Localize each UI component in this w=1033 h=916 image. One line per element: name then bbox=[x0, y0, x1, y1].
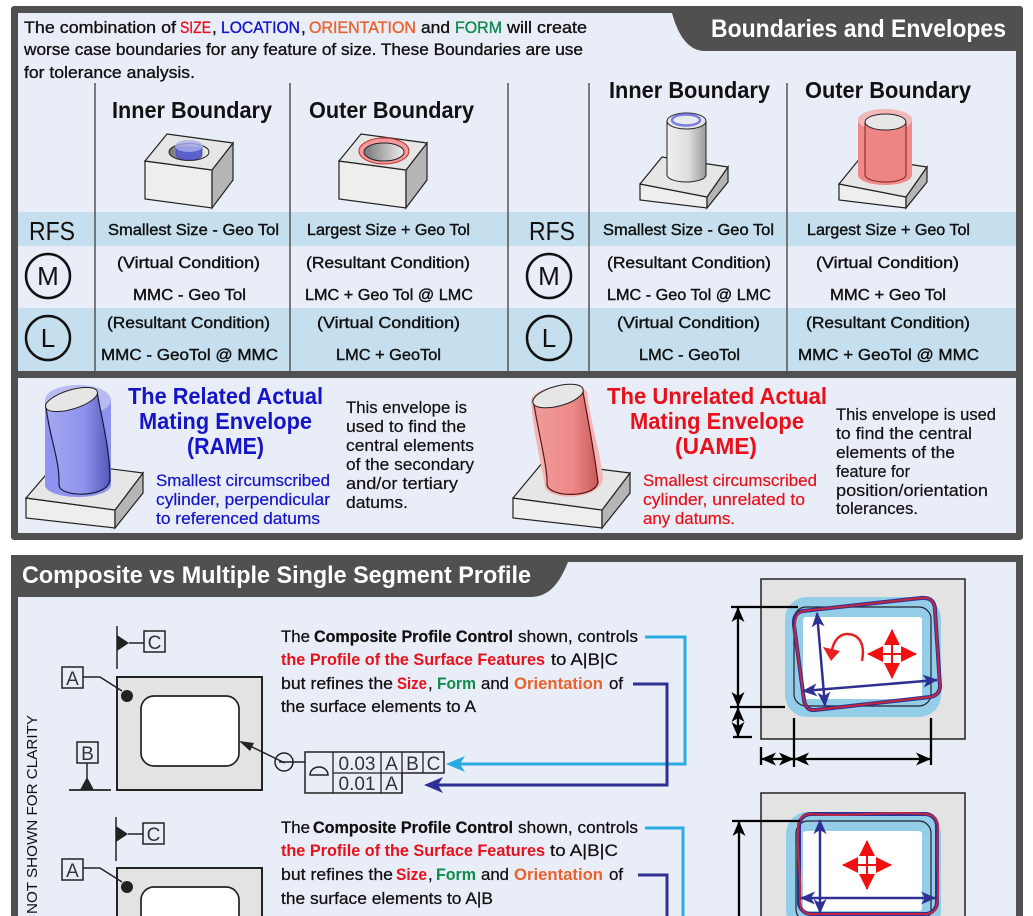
arrow: refinement to A bbox=[424, 684, 667, 793]
column headings: Outer Boundary bbox=[805, 77, 971, 103]
intro text: and bbox=[421, 18, 450, 37]
drawing 2: part with datums: A bbox=[66, 861, 79, 882]
description 2: but refines the bbox=[281, 866, 393, 884]
RAME definition: to referenced datums bbox=[156, 510, 320, 528]
icon: RAME bent pin in blue cylinder bbox=[26, 383, 143, 528]
description 1: of bbox=[609, 675, 623, 693]
description 1: but refines the bbox=[281, 675, 393, 693]
symbol: LMC left: L bbox=[41, 323, 55, 353]
UAME definition: Smallest circumscribed bbox=[643, 472, 817, 490]
table cell text: (Resultant Condition) bbox=[607, 255, 771, 272]
feature control frame 1: C bbox=[427, 754, 440, 775]
intro text: , bbox=[212, 18, 217, 37]
table cell text: (Resultant Condition) bbox=[306, 255, 470, 272]
header tab: boundaries and envelopes: Boundaries and Envelopes bbox=[711, 15, 1006, 43]
table cell text: LMC - Geo Tol @ LMC bbox=[607, 287, 771, 304]
UAME usage note: feature for bbox=[836, 463, 910, 481]
UAME title: (UAME) bbox=[675, 433, 757, 459]
table cell text: Smallest Size - Geo Tol bbox=[603, 222, 774, 239]
description 2: Form bbox=[436, 866, 476, 884]
arrows: second description bbox=[638, 828, 683, 916]
RAME title: Mating Envelope bbox=[139, 408, 312, 434]
description 1: Orientation bbox=[514, 675, 603, 693]
RAME usage note: central elements bbox=[346, 437, 474, 455]
drawing 1: part with datums: B bbox=[81, 744, 94, 765]
table cell text: MMC + Geo Tol bbox=[830, 287, 946, 304]
intro text: will create bbox=[506, 18, 587, 37]
icon: red translation cross bbox=[868, 630, 916, 678]
description 1: Composite Profile Control bbox=[314, 628, 513, 646]
drawing 1: part with datums: C bbox=[148, 633, 161, 654]
UAME usage note: to find the central bbox=[836, 425, 972, 443]
description 1: shown, controls bbox=[518, 628, 638, 646]
description 1 bbox=[281, 628, 638, 716]
description 2: Composite Profile Control bbox=[313, 819, 513, 837]
symbol: MMC left: M bbox=[37, 261, 59, 291]
drawing 1: part with datums: A bbox=[66, 669, 79, 690]
UAME title bbox=[607, 383, 827, 459]
dimension arrows: blue bbox=[803, 613, 937, 706]
intro text: , bbox=[301, 18, 306, 37]
table cell text: (Resultant Condition) bbox=[806, 315, 970, 332]
UAME usage note: elements of the bbox=[836, 444, 955, 462]
UAME usage note bbox=[836, 406, 996, 518]
RAME usage note: used to find the bbox=[346, 418, 466, 436]
symbol: MMC left bbox=[26, 254, 70, 298]
intro text: ORIENTATION bbox=[309, 18, 416, 37]
intro text: SIZE bbox=[180, 18, 211, 37]
feature control frame 1: 0.03 bbox=[339, 754, 375, 775]
RAME usage note: of the secondary bbox=[346, 456, 475, 474]
intro text bbox=[23, 18, 587, 82]
table cell text: LMC - GeoTol bbox=[639, 347, 740, 364]
UAME title: The Unrelated Actual bbox=[607, 383, 827, 409]
UAME usage note: tolerances. bbox=[836, 500, 918, 518]
feature control frame 1: 0.01 bbox=[339, 774, 375, 795]
RAME usage note: and/or tertiary bbox=[346, 475, 459, 493]
intro text: The combination of bbox=[24, 18, 176, 37]
table cell text: (Resultant Condition) bbox=[107, 315, 270, 332]
description 2: shown, controls bbox=[518, 819, 638, 837]
UAME definition bbox=[643, 472, 817, 528]
header tab: composite vs multiple: Composite vs Multiple Single Segment Profile bbox=[22, 562, 531, 589]
icon: hole outer boundary bbox=[339, 134, 427, 208]
RAME title: (RAME) bbox=[187, 433, 264, 459]
description 1: Size bbox=[397, 675, 427, 693]
description 2: Orientation bbox=[514, 866, 603, 884]
table cell text: MMC - Geo Tol bbox=[133, 287, 246, 304]
dimension arrows: blue bbox=[801, 820, 935, 913]
icon: pin inner boundary bbox=[640, 113, 728, 208]
dimension lines: black bbox=[730, 607, 931, 767]
symbol: MMC right bbox=[527, 254, 571, 298]
intro text: worse case boundaries for any feature of size. These Boundaries are use bbox=[23, 40, 583, 59]
table cell text: (Virtual Condition) bbox=[617, 315, 760, 332]
description 1: , bbox=[428, 675, 433, 693]
table cell text: (Virtual Condition) bbox=[816, 255, 959, 272]
icon: red rotation arrow bbox=[823, 634, 863, 661]
description 2: , bbox=[428, 866, 433, 884]
column headings bbox=[112, 77, 971, 123]
icon: UAME bent pin in red cylinder bbox=[513, 380, 630, 528]
table column lines bbox=[95, 83, 787, 371]
intro text: for tolerance analysis. bbox=[24, 63, 195, 82]
description 2 bbox=[281, 819, 638, 908]
table row bands bbox=[18, 212, 1016, 371]
dimension line: black bbox=[732, 821, 800, 916]
arrow: profile to ABC bbox=[446, 637, 685, 772]
diagram 1: tolerance zones rotated bbox=[730, 579, 965, 767]
column headings: Inner Boundary bbox=[609, 77, 770, 103]
row label: RFS left: RFS bbox=[29, 216, 75, 246]
intro text: LOCATION bbox=[221, 18, 300, 37]
symbol: LMC right: L bbox=[542, 323, 556, 353]
symbol: LMC left bbox=[26, 316, 70, 360]
icon: pin outer boundary bbox=[839, 109, 927, 208]
drawing 2: part with datums: C bbox=[147, 825, 160, 846]
feature control frame 1: A bbox=[385, 754, 398, 775]
RAME usage note bbox=[346, 399, 475, 512]
panel: boundaries and envelopes bbox=[11, 6, 1023, 540]
panel: composite vs multiple single segment profile bbox=[11, 555, 1023, 916]
header tab: boundaries and envelopes bbox=[672, 13, 1016, 51]
symbol: LMC right bbox=[527, 316, 571, 360]
UAME usage note: This envelope is used bbox=[836, 406, 996, 424]
description 1: the Profile of the Surface Features bbox=[281, 651, 545, 669]
RAME usage note: datums. bbox=[346, 494, 408, 512]
description 1: The bbox=[281, 628, 310, 646]
table cell text: Largest Size + Geo Tol bbox=[307, 222, 470, 239]
description 2: the Profile of the Surface Features bbox=[281, 842, 545, 860]
table cell text bbox=[101, 222, 979, 364]
UAME usage note: position/orientation bbox=[836, 482, 988, 500]
feature control frame 1: A bbox=[385, 774, 398, 795]
table cell text: LMC + Geo Tol @ LMC bbox=[305, 287, 473, 304]
feature control frame 1: B bbox=[406, 754, 419, 775]
description 1: to A|B|C bbox=[551, 651, 618, 669]
description 2: of bbox=[609, 866, 623, 884]
drawing 1: part with datums bbox=[62, 626, 262, 790]
table cell text: LMC + GeoTol bbox=[336, 347, 441, 364]
UAME definition: any datums. bbox=[643, 510, 735, 528]
RAME usage note: This envelope is bbox=[346, 399, 467, 417]
icon: red translation cross bbox=[843, 841, 891, 889]
description 1: Form bbox=[437, 675, 476, 693]
drawing 2: part with datums bbox=[62, 817, 262, 916]
table cell text: (Virtual Condition) bbox=[117, 255, 260, 272]
description 1: and bbox=[481, 675, 509, 693]
description 2: The bbox=[281, 819, 310, 837]
side note: NOT SHOWN FOR CLARITY bbox=[24, 715, 41, 914]
intro text: FORM bbox=[455, 18, 502, 37]
RAME title: The Related Actual bbox=[128, 383, 323, 409]
description 2: and bbox=[481, 866, 509, 884]
row label: RFS right: RFS bbox=[529, 216, 575, 246]
icon: hole inner boundary bbox=[145, 134, 233, 208]
table cell text: (Virtual Condition) bbox=[317, 315, 460, 332]
symbol: MMC right: M bbox=[538, 261, 560, 291]
RAME definition: Smallest circumscribed bbox=[156, 472, 330, 490]
RAME definition bbox=[156, 472, 331, 528]
UAME title: Mating Envelope bbox=[630, 408, 804, 434]
RAME title bbox=[128, 383, 323, 459]
description 2: the surface elements to A|B bbox=[281, 890, 493, 908]
diagram 2: tolerance zones parallel bbox=[732, 793, 965, 916]
column headings: Outer Boundary bbox=[309, 97, 474, 123]
UAME definition: cylinder, unrelated to bbox=[643, 491, 805, 509]
leader arrow to feature control frame bbox=[239, 741, 305, 771]
table cell text: MMC - GeoTol @ MMC bbox=[101, 347, 278, 364]
RAME definition: cylinder, perpendicular bbox=[156, 491, 331, 509]
feature control frame 1 bbox=[305, 752, 444, 795]
table cell text: MMC + GeoTol @ MMC bbox=[798, 347, 979, 364]
column headings: Inner Boundary bbox=[112, 97, 272, 123]
description 2: to A|B|C bbox=[550, 842, 618, 860]
table cell text: Smallest Size - Geo Tol bbox=[108, 222, 279, 239]
description 1: the surface elements to A bbox=[281, 698, 476, 716]
table cell text: Largest Size + Geo Tol bbox=[807, 222, 970, 239]
description 2: Size bbox=[396, 866, 427, 884]
